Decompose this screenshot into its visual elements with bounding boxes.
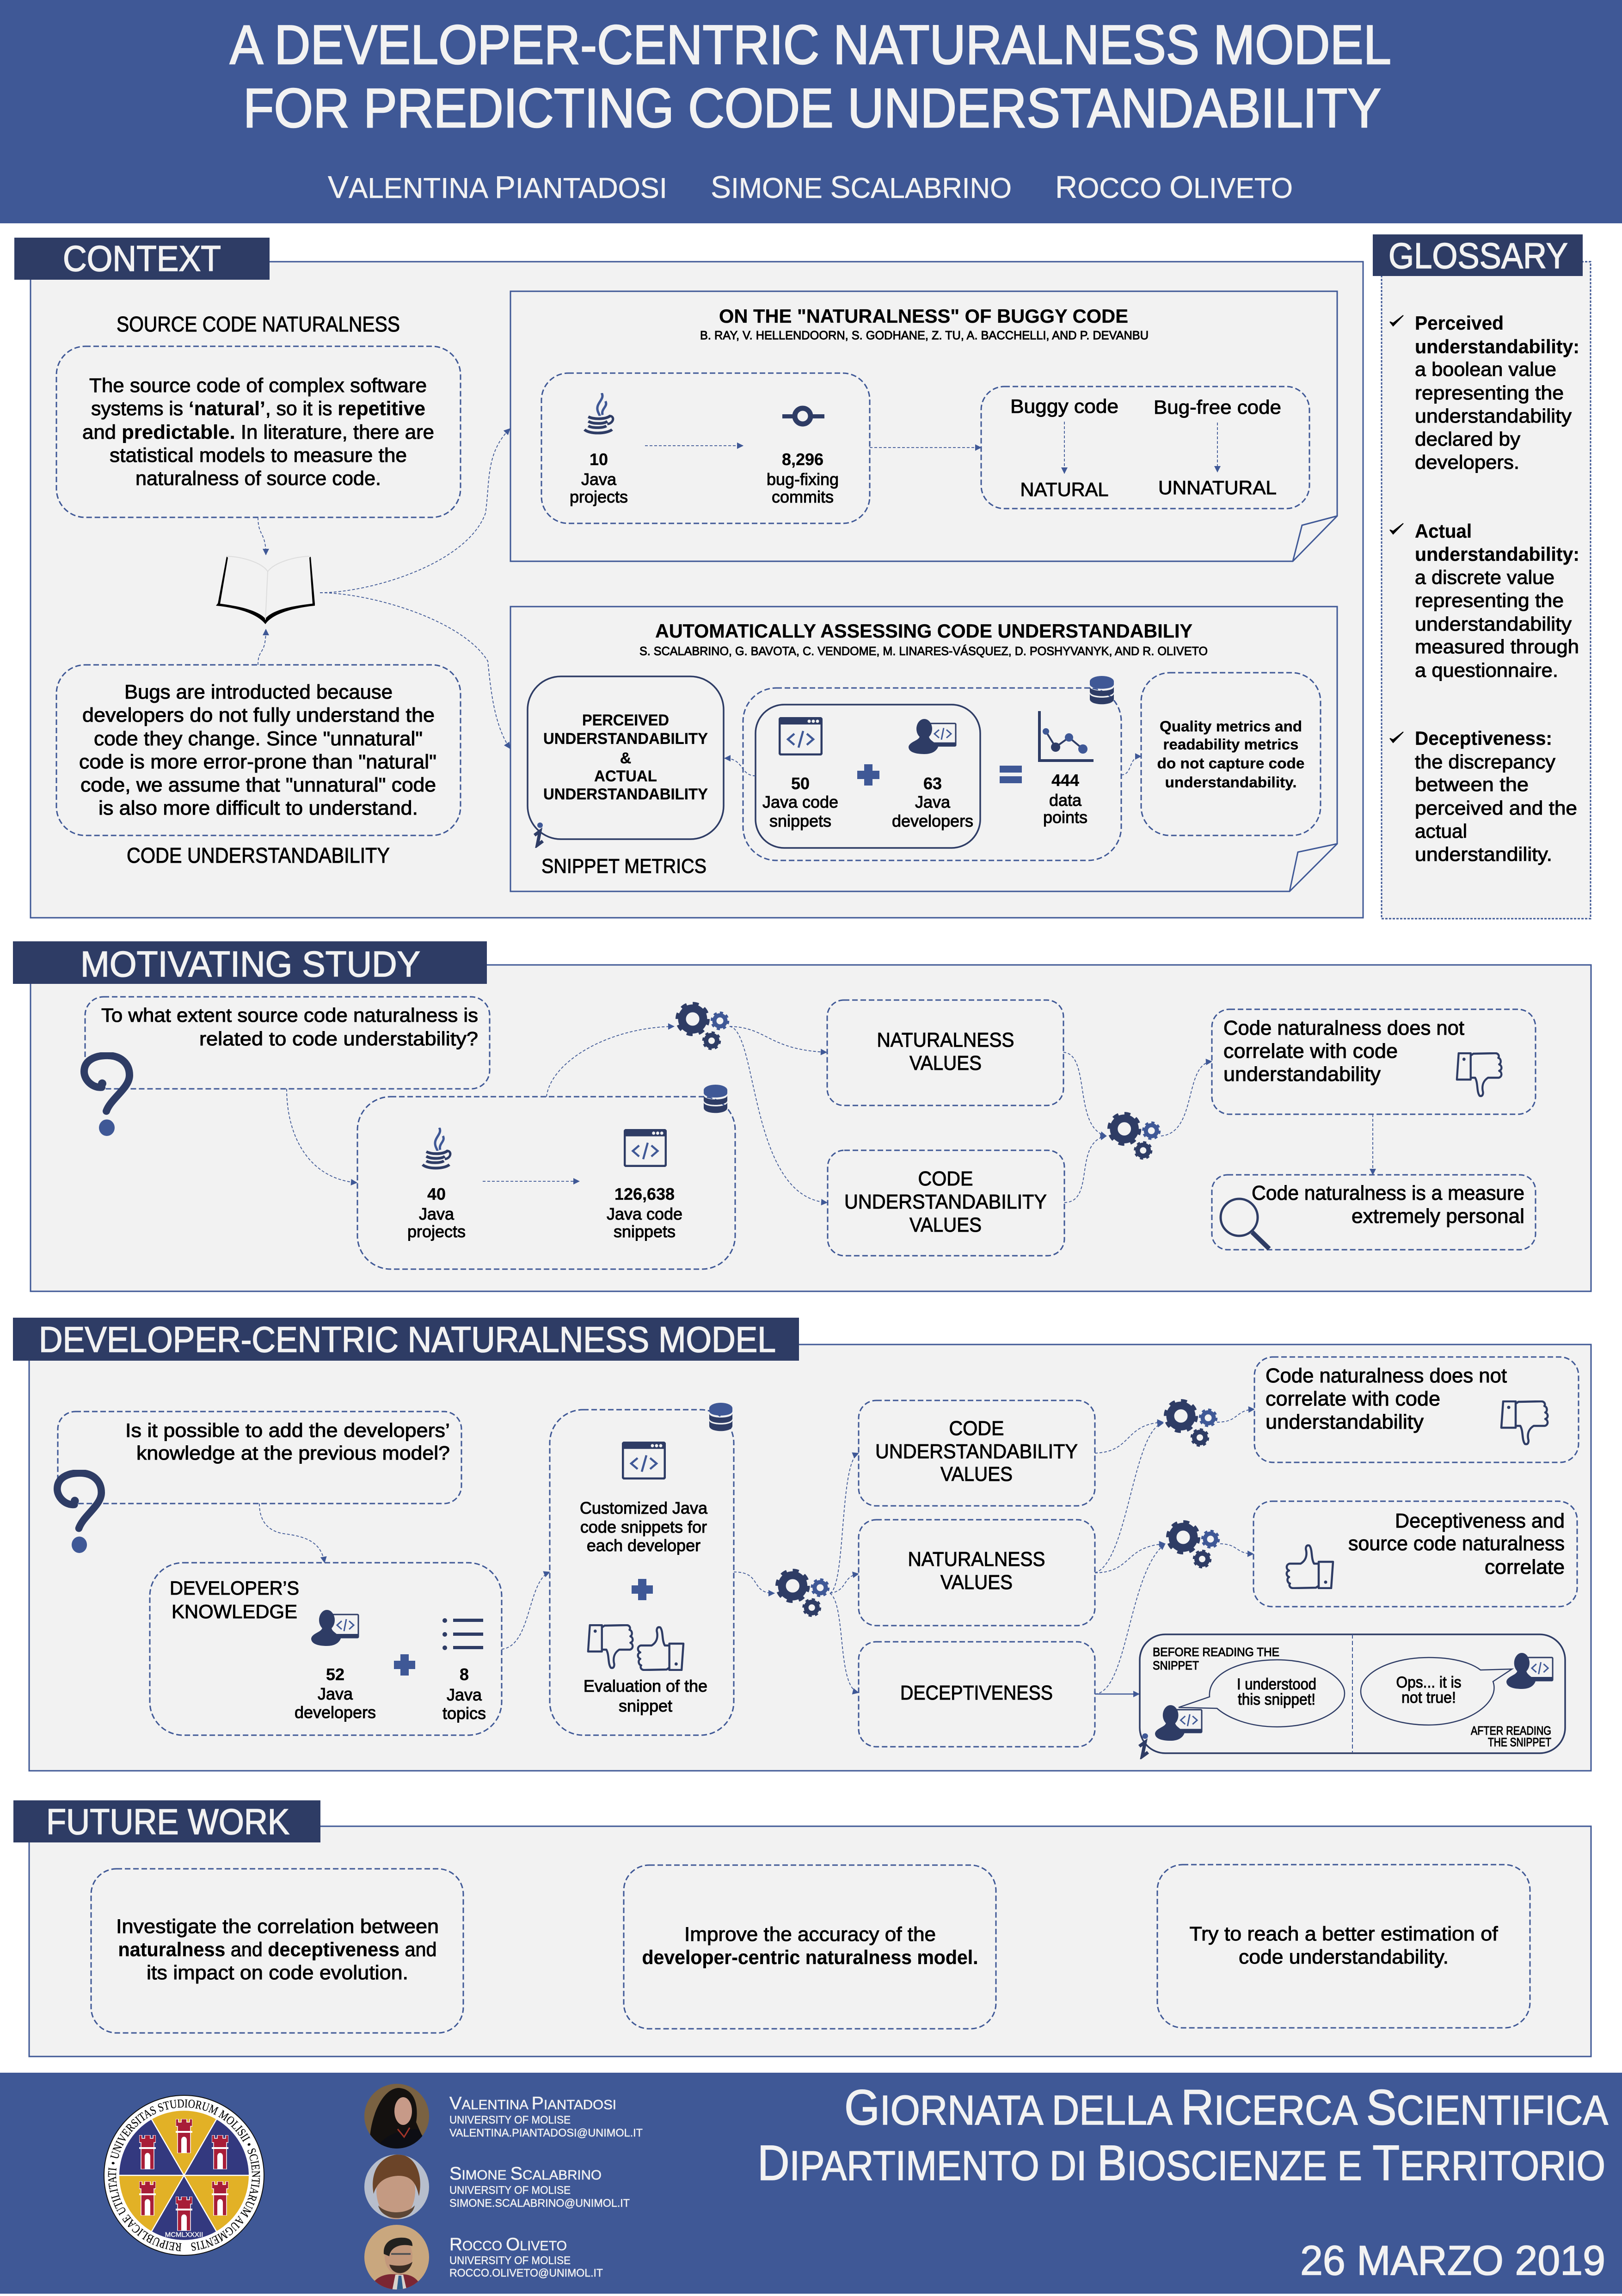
dataset box (357, 1085, 735, 1269)
speech bubble: after (1361, 1658, 1512, 1725)
box: naturalness values (859, 1520, 1095, 1626)
snippet metrics box: PERCEIVED (582, 712, 669, 729)
box: naturalness values: NATURALNESS (908, 1548, 1045, 1571)
text box: code understandability: code they change. Since "unnatural" (94, 728, 423, 750)
finding box (1141, 673, 1321, 835)
box: code understandability values: UNDERSTANDABILITY (875, 1440, 1078, 1463)
panel: future work (13, 1800, 1591, 2057)
university logo: MCMLXXXII (165, 2231, 203, 2239)
stat: bug-fixing commits: bug-fixing (767, 470, 839, 489)
stat: java projects: projects (570, 487, 628, 506)
box: finding no correlation: Code naturalness does not (1223, 1017, 1464, 1039)
developer knowledge box: 8 (460, 1665, 469, 1684)
paper authors: B. RAY, V. HELLENDOORN, S. GODHANE, Z. TU, A. BACCHELLI, AND P. DEVANBU (700, 328, 1149, 342)
arrow: question to dataset (287, 1089, 357, 1183)
text box: source code naturalness (56, 346, 461, 517)
panel: context (14, 238, 1363, 918)
text box: source code naturalness: naturalness of source code. (135, 467, 381, 490)
speech bubble: before (1179, 1660, 1345, 1727)
box: finding no correlation: Code naturalness does not (1266, 1364, 1507, 1387)
box: finding personal: Code naturalness is a measure (1252, 1182, 1524, 1204)
arrow: gears to deceptiveness (830, 1593, 859, 1693)
arrow: deceptiveness to lower gears (1095, 1544, 1165, 1694)
glossary heading: GLOSSARY (1389, 235, 1568, 276)
finding box: Quality metrics and (1160, 718, 1302, 735)
customized snippets box: each developer (587, 1536, 700, 1555)
icon: plus (632, 1579, 653, 1600)
authors: ROCCO OLIVETO (1055, 170, 1293, 205)
glossary item: perceived understandability: declared by (1415, 428, 1520, 450)
text box: code understandability (56, 665, 461, 835)
future work box 2 (624, 1865, 996, 2029)
future work box 1: Investigate the correlation between (116, 1915, 439, 1938)
deceptiveness example box (1139, 1634, 1565, 1756)
contact: simone scalabrino: SIMONE.SCALABRINO@UNIMOL.IT (449, 2197, 630, 2210)
text box: code understandability: Bugs are introducted because (124, 681, 393, 703)
text box: source code naturalness: systems is ‘natural’, so it is repetitive (91, 398, 425, 420)
icon: thumb down (1457, 1053, 1501, 1096)
snippet metrics box: & (620, 749, 631, 767)
box: finding no correlation: understandability (1266, 1411, 1424, 1433)
arrow: understandability to book (258, 629, 266, 665)
developer knowledge box: topics (442, 1704, 486, 1723)
speech bubble: after: Ops... it is (1396, 1674, 1461, 1691)
icon: java (423, 1128, 450, 1168)
contact: rocco oliveto: UNIVERSITY OF MOLISE (449, 2254, 571, 2267)
stat: bug-fixing commits (767, 450, 839, 506)
stat: bug-fixing commits: 8,296 (782, 450, 823, 469)
icon: code window (625, 1130, 666, 1166)
event name: GIORNATA DELLA RICERCA SCIENTIFICA (844, 2079, 1608, 2135)
header band (0, 0, 1622, 223)
box: finding correlate (1253, 1501, 1577, 1607)
question box: Is it possible to add the developers’ (125, 1419, 450, 1441)
arrow: lower gears to finding (1220, 1544, 1253, 1554)
glossary item: actual understandability: a questionnaire. (1415, 659, 1558, 681)
icon: database (709, 1403, 732, 1431)
developer knowledge box: DEVELOPER’S (170, 1577, 299, 1599)
icon: thumb up (1287, 1545, 1333, 1588)
deceptiveness example box: AFTER READING (1471, 1724, 1551, 1737)
arrow: understandability to gears (1064, 1136, 1106, 1203)
icon: plus (394, 1654, 415, 1676)
box: finding correlate: correlate (1485, 1556, 1565, 1578)
glossary item: actual understandability (1390, 520, 1579, 681)
future work heading: FUTURE WORK (46, 1801, 289, 1842)
customized snippets box: Evaluation of the (584, 1676, 707, 1695)
deceptiveness example box: BEFORE READING THE (1153, 1645, 1279, 1659)
study box (743, 676, 1121, 860)
customized snippets box: code snippets for (580, 1517, 707, 1536)
event date: 26 MARZO 2019 (1300, 2238, 1605, 2284)
glossary item: deceptiveness: actual (1415, 820, 1467, 842)
dataset box: Java (419, 1204, 455, 1223)
arrow: projects to snippets (483, 1181, 579, 1182)
heading: code understandability: CODE UNDERSTANDABILITY (127, 843, 390, 867)
arrow: naturalness to book (258, 517, 266, 555)
finding box: understandability. (1165, 774, 1296, 791)
heading: source code naturalness: SOURCE CODE NATURALNESS (117, 312, 400, 336)
event name: DIPARTIMENTO DI BIOSCIENZE E TERRITORIO (757, 2135, 1605, 2191)
arrow: understandability to gears (1095, 1422, 1163, 1453)
question box (58, 1412, 461, 1504)
paper: naturalness of buggy code (510, 291, 1337, 561)
university logo: REIPUBLICAE UTILITATI • UNIVERSITAS STUDIORUM MOLISII • SCIENTIARUM AUGMENTIS (105, 2097, 263, 2254)
box: code understandability values: CODE (949, 1417, 1004, 1440)
icon: thumb down (1501, 1401, 1548, 1444)
glossary item: perceived understandability: Perceived (1415, 312, 1504, 334)
study box: data (1049, 791, 1082, 810)
speech bubble: after: not true! (1401, 1689, 1456, 1707)
glossary item: actual understandability: representing the (1415, 589, 1564, 611)
inner box: snippets plus developers: Java code (762, 792, 838, 811)
contact: rocco oliveto: ROCCO.OLIVETO@UNIMOL.IT (449, 2267, 603, 2279)
dataset box: snippets (614, 1222, 676, 1241)
speech bubble: before: I understood (1237, 1676, 1316, 1693)
box: deceptiveness (859, 1642, 1095, 1747)
arrow: gears to understandability values (730, 1026, 827, 1203)
inner box: snippets plus developers: 63 (923, 774, 942, 793)
box: finding no correlation: correlate with code (1266, 1387, 1440, 1410)
customized snippets box: snippet (619, 1696, 672, 1715)
arrow: gears to understandability (830, 1453, 859, 1593)
result box: Bug-free code (1154, 396, 1281, 418)
photo: rocco oliveto (364, 2225, 430, 2291)
result box: Buggy code (1010, 395, 1118, 417)
inner box: snippets plus developers: 50 (791, 774, 810, 793)
glossary item: perceived understandability: developers. (1415, 451, 1519, 473)
question box (85, 997, 490, 1089)
question box: knowledge at the previous model? (136, 1442, 450, 1464)
icon: question mark (57, 1473, 101, 1553)
arrow: question to knowledge (259, 1504, 325, 1563)
arrow: book to buggy code paper (320, 429, 510, 593)
arrow: buggy to natural (1064, 422, 1065, 473)
arrow: naturalness to gears (1063, 1052, 1106, 1136)
icon: magnifier (1221, 1199, 1269, 1249)
text box: code understandability: developers do not fully understand the (82, 704, 435, 726)
paper title: ON THE "NATURALNESS" OF BUGGY CODE (719, 305, 1128, 327)
paper: automatically assessing code understandability (510, 607, 1337, 891)
snippet metrics box (528, 676, 724, 839)
arrow: gears to finding (1161, 1062, 1212, 1136)
contact: valentina piantadosi: UNIVERSITY OF MOLISE (449, 2114, 571, 2126)
footer band (0, 2073, 1622, 2294)
future work box 2: developer-centric naturalness model. (642, 1946, 978, 1969)
glossary item: deceptiveness: Deceptiveness: (1415, 727, 1552, 749)
box: naturalness values: VALUES (909, 1052, 982, 1074)
customized snippets box: Customized Java (580, 1498, 708, 1517)
snippet metrics box: ACTUAL (594, 767, 657, 785)
arrow: study to finding (1121, 756, 1141, 775)
contact: simone scalabrino (449, 2164, 630, 2210)
study box: 444 (1051, 771, 1079, 790)
arrow: snippets to gears (734, 1572, 774, 1593)
finding box: readability metrics (1163, 736, 1298, 753)
text box: source code naturalness: The source code of complex software (89, 374, 427, 397)
paper authors: S. SCALABRINO, G. BAVOTA, C. VENDOME, M. LINARES-VÁSQUEZ, D. POSHYVANYK, AND R. OLIVETO (639, 644, 1208, 658)
stat: java projects (570, 450, 628, 506)
panel: motivating study (13, 941, 1591, 1291)
contact: rocco oliveto (449, 2235, 603, 2279)
glossary item: perceived understandability: a boolean value (1415, 358, 1556, 380)
dataset box (541, 373, 870, 523)
dataset box: 126,638 (614, 1185, 675, 1203)
icon: code window (780, 718, 822, 755)
event name (757, 2079, 1608, 2191)
future work box 1: naturalness and deceptiveness and (118, 1939, 436, 1961)
glossary item: actual understandability: Actual (1415, 520, 1472, 542)
inner box: snippets plus developers: developers (892, 811, 973, 830)
arrow: gears to naturalness (830, 1574, 859, 1593)
box: deceptiveness: DECEPTIVENESS (900, 1682, 1053, 1704)
developer knowledge box: Java (318, 1684, 353, 1703)
icon: info (535, 823, 543, 845)
finding box: do not capture code (1157, 755, 1305, 772)
future work box 3 (1157, 1865, 1530, 2028)
authors: SIMONE SCALABRINO (711, 170, 1012, 205)
icon: java (584, 393, 613, 433)
box: finding no correlation: correlate with code (1223, 1040, 1398, 1062)
arrow: finding to personal (1372, 1114, 1373, 1175)
text box: code understandability: code is more error-prone than "natural" (79, 751, 436, 773)
future work box 3: code understandability. (1239, 1946, 1449, 1968)
box: finding personal: extremely personal (1352, 1205, 1524, 1228)
box: naturalness values: VALUES (940, 1571, 1013, 1594)
model heading: DEVELOPER-CENTRIC NATURALNESS MODEL (39, 1319, 776, 1360)
icon: developer after (1506, 1653, 1553, 1689)
panel: glossary (1373, 234, 1591, 919)
icon: database (704, 1085, 727, 1113)
box: finding correlate: Deceptiveness and (1395, 1510, 1565, 1532)
contact: simone scalabrino: UNIVERSITY OF MOLISE (449, 2184, 571, 2197)
icon: gears (1109, 1113, 1160, 1159)
glossary item: deceptiveness: understandility. (1415, 843, 1552, 865)
glossary item: perceived understandability: understandability: (1415, 336, 1579, 357)
dataset box: 40 (427, 1185, 446, 1203)
box: code understandability values: UNDERSTANDABILITY (844, 1191, 1047, 1213)
icon: gears (777, 1570, 829, 1616)
box: code understandability values: CODE (918, 1167, 973, 1190)
glossary item: deceptiveness: perceived and the (1415, 797, 1577, 819)
title (230, 14, 1391, 139)
icon: list (442, 1618, 483, 1650)
arrow: book to understandability paper (320, 593, 510, 749)
glossary item: deceptiveness: the discrepancy (1415, 751, 1555, 773)
deceptiveness example box: THE SNIPPET (1488, 1735, 1551, 1749)
text box: source code naturalness: statistical models to measure the (110, 444, 407, 467)
dataset box: projects (407, 1222, 466, 1241)
arrow: naturalness to lower gears (1095, 1544, 1165, 1573)
inner box: snippets plus developers (756, 705, 980, 848)
icon: database (1090, 676, 1114, 704)
glossary item: deceptiveness (1390, 727, 1577, 865)
icon: info (1139, 1733, 1148, 1756)
text box: code understandability: is also more difficult to understand. (98, 797, 418, 819)
speech bubble: before: this snippet! (1238, 1691, 1315, 1708)
glossary item: perceived understandability (1390, 312, 1579, 473)
snippet metrics box: UNDERSTANDABILITY (543, 730, 708, 748)
arrow: gears to naturalness values (730, 1026, 827, 1052)
glossary item: deceptiveness: between the (1415, 774, 1529, 795)
panel: developer-centric naturalness model (13, 1318, 1591, 1771)
future work box 2: Improve the accuracy of the (684, 1923, 936, 1946)
icon: plus (857, 764, 879, 786)
glossary item: actual understandability: measured through (1415, 636, 1579, 657)
authors (328, 170, 1293, 205)
box: code understandability values: VALUES (940, 1463, 1013, 1486)
arrow: dataset to gears (547, 1026, 674, 1097)
icon: developer (311, 1610, 358, 1646)
box: finding no correlation: understandability (1223, 1063, 1381, 1086)
inner box: snippets plus developers: Java (915, 792, 951, 811)
arrow: bug-free to unnatural (1217, 423, 1218, 472)
icon: question mark (84, 1056, 129, 1136)
icon: developer before (1155, 1705, 1202, 1741)
icon: lower gears (1168, 1522, 1219, 1567)
glossary item: actual understandability: understandability: (1415, 543, 1579, 565)
icon: commit (782, 408, 824, 424)
stat: java projects: Java (581, 470, 617, 489)
box: naturalness values: NATURALNESS (877, 1029, 1014, 1051)
future work box 1: its impact on code evolution. (147, 1962, 408, 1984)
text box: code understandability: code, we assume that "unnatural" code (80, 774, 436, 796)
contact: rocco oliveto: ROCCO OLIVETO (449, 2235, 567, 2254)
icon: developer (909, 719, 956, 754)
icon: open book (216, 556, 315, 624)
arrow: dataset to result (870, 447, 981, 448)
dataset box: Java code (607, 1204, 682, 1223)
contact: simone scalabrino: SIMONE SCALABRINO (449, 2164, 602, 2184)
context heading (14, 238, 270, 280)
developer knowledge box: KNOWLEDGE (172, 1601, 297, 1622)
box: code understandability values: VALUES (909, 1214, 982, 1236)
question box: To what extent source code naturalness is (101, 1004, 478, 1026)
result box: UNNATURAL (1158, 477, 1277, 498)
study box: points (1043, 808, 1087, 827)
icon: thumbs (588, 1625, 683, 1670)
authors: VALENTINA PIANTADOSI (328, 170, 667, 205)
arrow: study to metrics (725, 758, 756, 776)
text box: source code naturalness: and predictable. In literature, there are (82, 421, 434, 443)
label: snippet metrics: SNIPPET METRICS (541, 855, 707, 878)
arrow: projects to commits (645, 445, 743, 446)
customized snippets box (550, 1403, 734, 1735)
glossary item: perceived understandability: understandability (1415, 405, 1572, 427)
contact: valentina piantadosi: VALENTINA.PIANTADOSI@UNIMOL.IT (449, 2127, 643, 2139)
arrow: naturalness to upper gears (1095, 1423, 1163, 1573)
glossary item: actual understandability: understandability (1415, 613, 1572, 635)
developer knowledge box (150, 1563, 502, 1735)
box: finding no correlation (1212, 1009, 1536, 1114)
motivating study heading: MOTIVATING STUDY (80, 944, 420, 984)
developer knowledge box: developers (295, 1703, 376, 1722)
title: A DEVELOPER-CENTRIC NATURALNESS MODEL (230, 14, 1391, 76)
paper title: AUTOMATICALLY ASSESSING CODE UNDERSTANDABILIY (655, 620, 1192, 642)
box: naturalness values (827, 1000, 1063, 1105)
arrow: upper gears to finding (1217, 1409, 1254, 1422)
box: code understandability values (828, 1150, 1064, 1256)
icon: chart (1039, 711, 1094, 761)
icon: equals (1000, 766, 1022, 783)
box: finding no correlation (1254, 1357, 1579, 1462)
contact: valentina piantadosi (449, 2093, 643, 2139)
snippet metrics box: UNDERSTANDABILITY (543, 786, 708, 803)
inner box: snippets plus developers: snippets (769, 811, 831, 830)
photo: valentina piantadosi (364, 2084, 430, 2149)
photo: simone scalabrino (364, 2155, 430, 2220)
arrow: knowledge to snippets (502, 1572, 550, 1649)
future work box 3: Try to reach a better estimation of (1189, 1923, 1499, 1945)
glossary item: actual understandability: a discrete value (1415, 566, 1554, 588)
glossary item: perceived understandability: representing the (1415, 382, 1564, 404)
icon: code window (623, 1443, 665, 1479)
icon: upper gears (1165, 1400, 1216, 1446)
box: finding personal (1212, 1175, 1536, 1250)
box: code understandability values (859, 1400, 1095, 1506)
developer knowledge box: 52 (326, 1665, 344, 1684)
icon: gears (677, 1003, 728, 1049)
future work box 1 (91, 1869, 463, 2033)
stat: bug-fixing commits: commits (772, 487, 834, 506)
box: finding correlate: source code naturalness (1348, 1532, 1565, 1555)
stat: java projects: 10 (590, 450, 608, 469)
result box (981, 387, 1309, 509)
title: FOR PREDICTING CODE UNDERSTANDABILITY (243, 77, 1381, 139)
deceptiveness example box: SNIPPET (1153, 1658, 1199, 1672)
question box: related to code understability? (199, 1028, 478, 1050)
context heading: CONTEXT (63, 238, 221, 279)
contact: valentina piantadosi: VALENTINA PIANTADOSI (449, 2093, 616, 2113)
developer knowledge box: Java (447, 1685, 482, 1704)
result box: NATURAL (1020, 479, 1109, 500)
